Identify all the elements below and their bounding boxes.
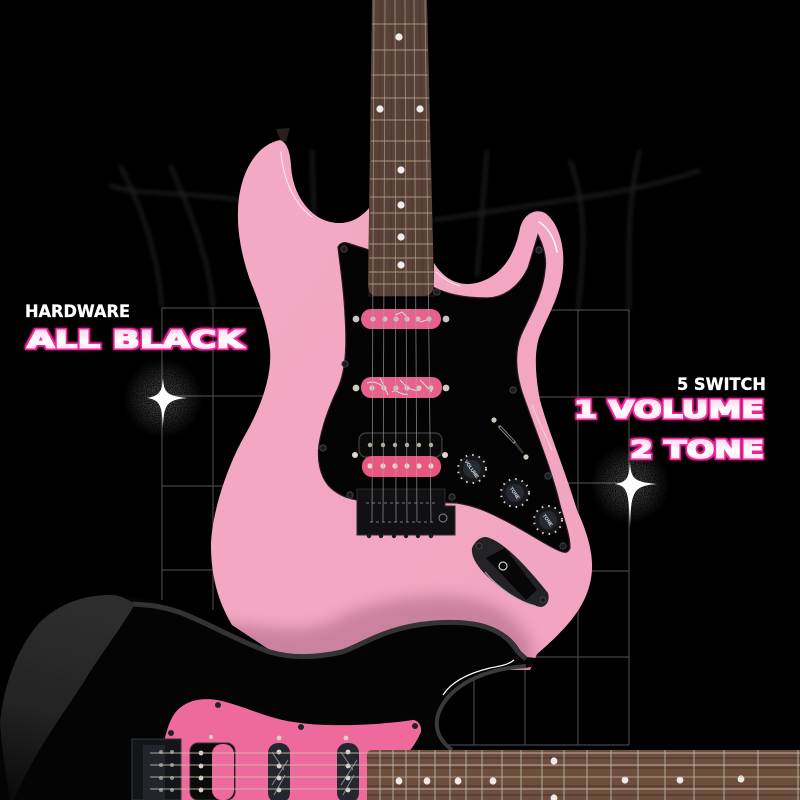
pickup middle	[353, 377, 449, 398]
shadow cast by black guitar	[228, 590, 538, 670]
black guitar	[0, 595, 800, 800]
volume knob	[458, 455, 486, 483]
left sheen	[0, 595, 135, 800]
body highlights	[281, 152, 557, 450]
horizontal fretboard	[367, 750, 800, 800]
pickguard	[318, 235, 570, 552]
sparkle left	[123, 358, 203, 438]
bridge	[132, 739, 181, 800]
guard screws	[168, 702, 418, 736]
background grid	[162, 308, 629, 745]
tone knob 2: TONE	[541, 513, 554, 528]
strings	[372, 0, 431, 522]
text: 5 switch 1 volume 2 tone	[574, 375, 766, 464]
pink body	[211, 140, 592, 670]
cutaway rim	[437, 666, 526, 750]
body rim	[133, 604, 526, 659]
pink pickguard	[160, 699, 421, 800]
black guitar strings	[150, 753, 800, 789]
text: hardware all black	[25, 302, 246, 354]
volume knob: VOLUME	[463, 459, 480, 481]
cutaway highlight	[443, 660, 514, 695]
bridge	[357, 489, 455, 538]
tone knob 1: TONE	[508, 486, 521, 501]
text: 5 switch 1 volume 2 tone: 5 SWITCH	[677, 375, 766, 395]
strap button	[276, 128, 290, 142]
text: hardware all black: HARDWARE	[25, 302, 130, 322]
pickguard screws	[320, 246, 566, 603]
text: 5 switch 1 volume 2 tone: 2 TONE	[630, 435, 764, 464]
pickup neck	[353, 309, 449, 329]
faint ghost guitar curves	[110, 150, 700, 310]
black body	[0, 595, 536, 800]
single coil 2	[337, 736, 359, 800]
control plate jack	[472, 537, 549, 607]
humbucker	[190, 735, 235, 800]
sparkle right	[590, 444, 670, 528]
single coil 1	[268, 736, 290, 800]
jack hole	[485, 548, 537, 606]
neck shadow and fretboard	[368, 0, 434, 296]
tone knob 1	[501, 479, 529, 507]
tone knob 2	[534, 506, 562, 534]
text: 5 switch 1 volume 2 tone: 1 VOLUME	[574, 395, 764, 424]
pickup humbucker	[352, 433, 448, 477]
text: hardware all black: ALL BLACK	[27, 325, 246, 354]
pink guitar	[200, 0, 592, 700]
switch	[491, 417, 529, 460]
